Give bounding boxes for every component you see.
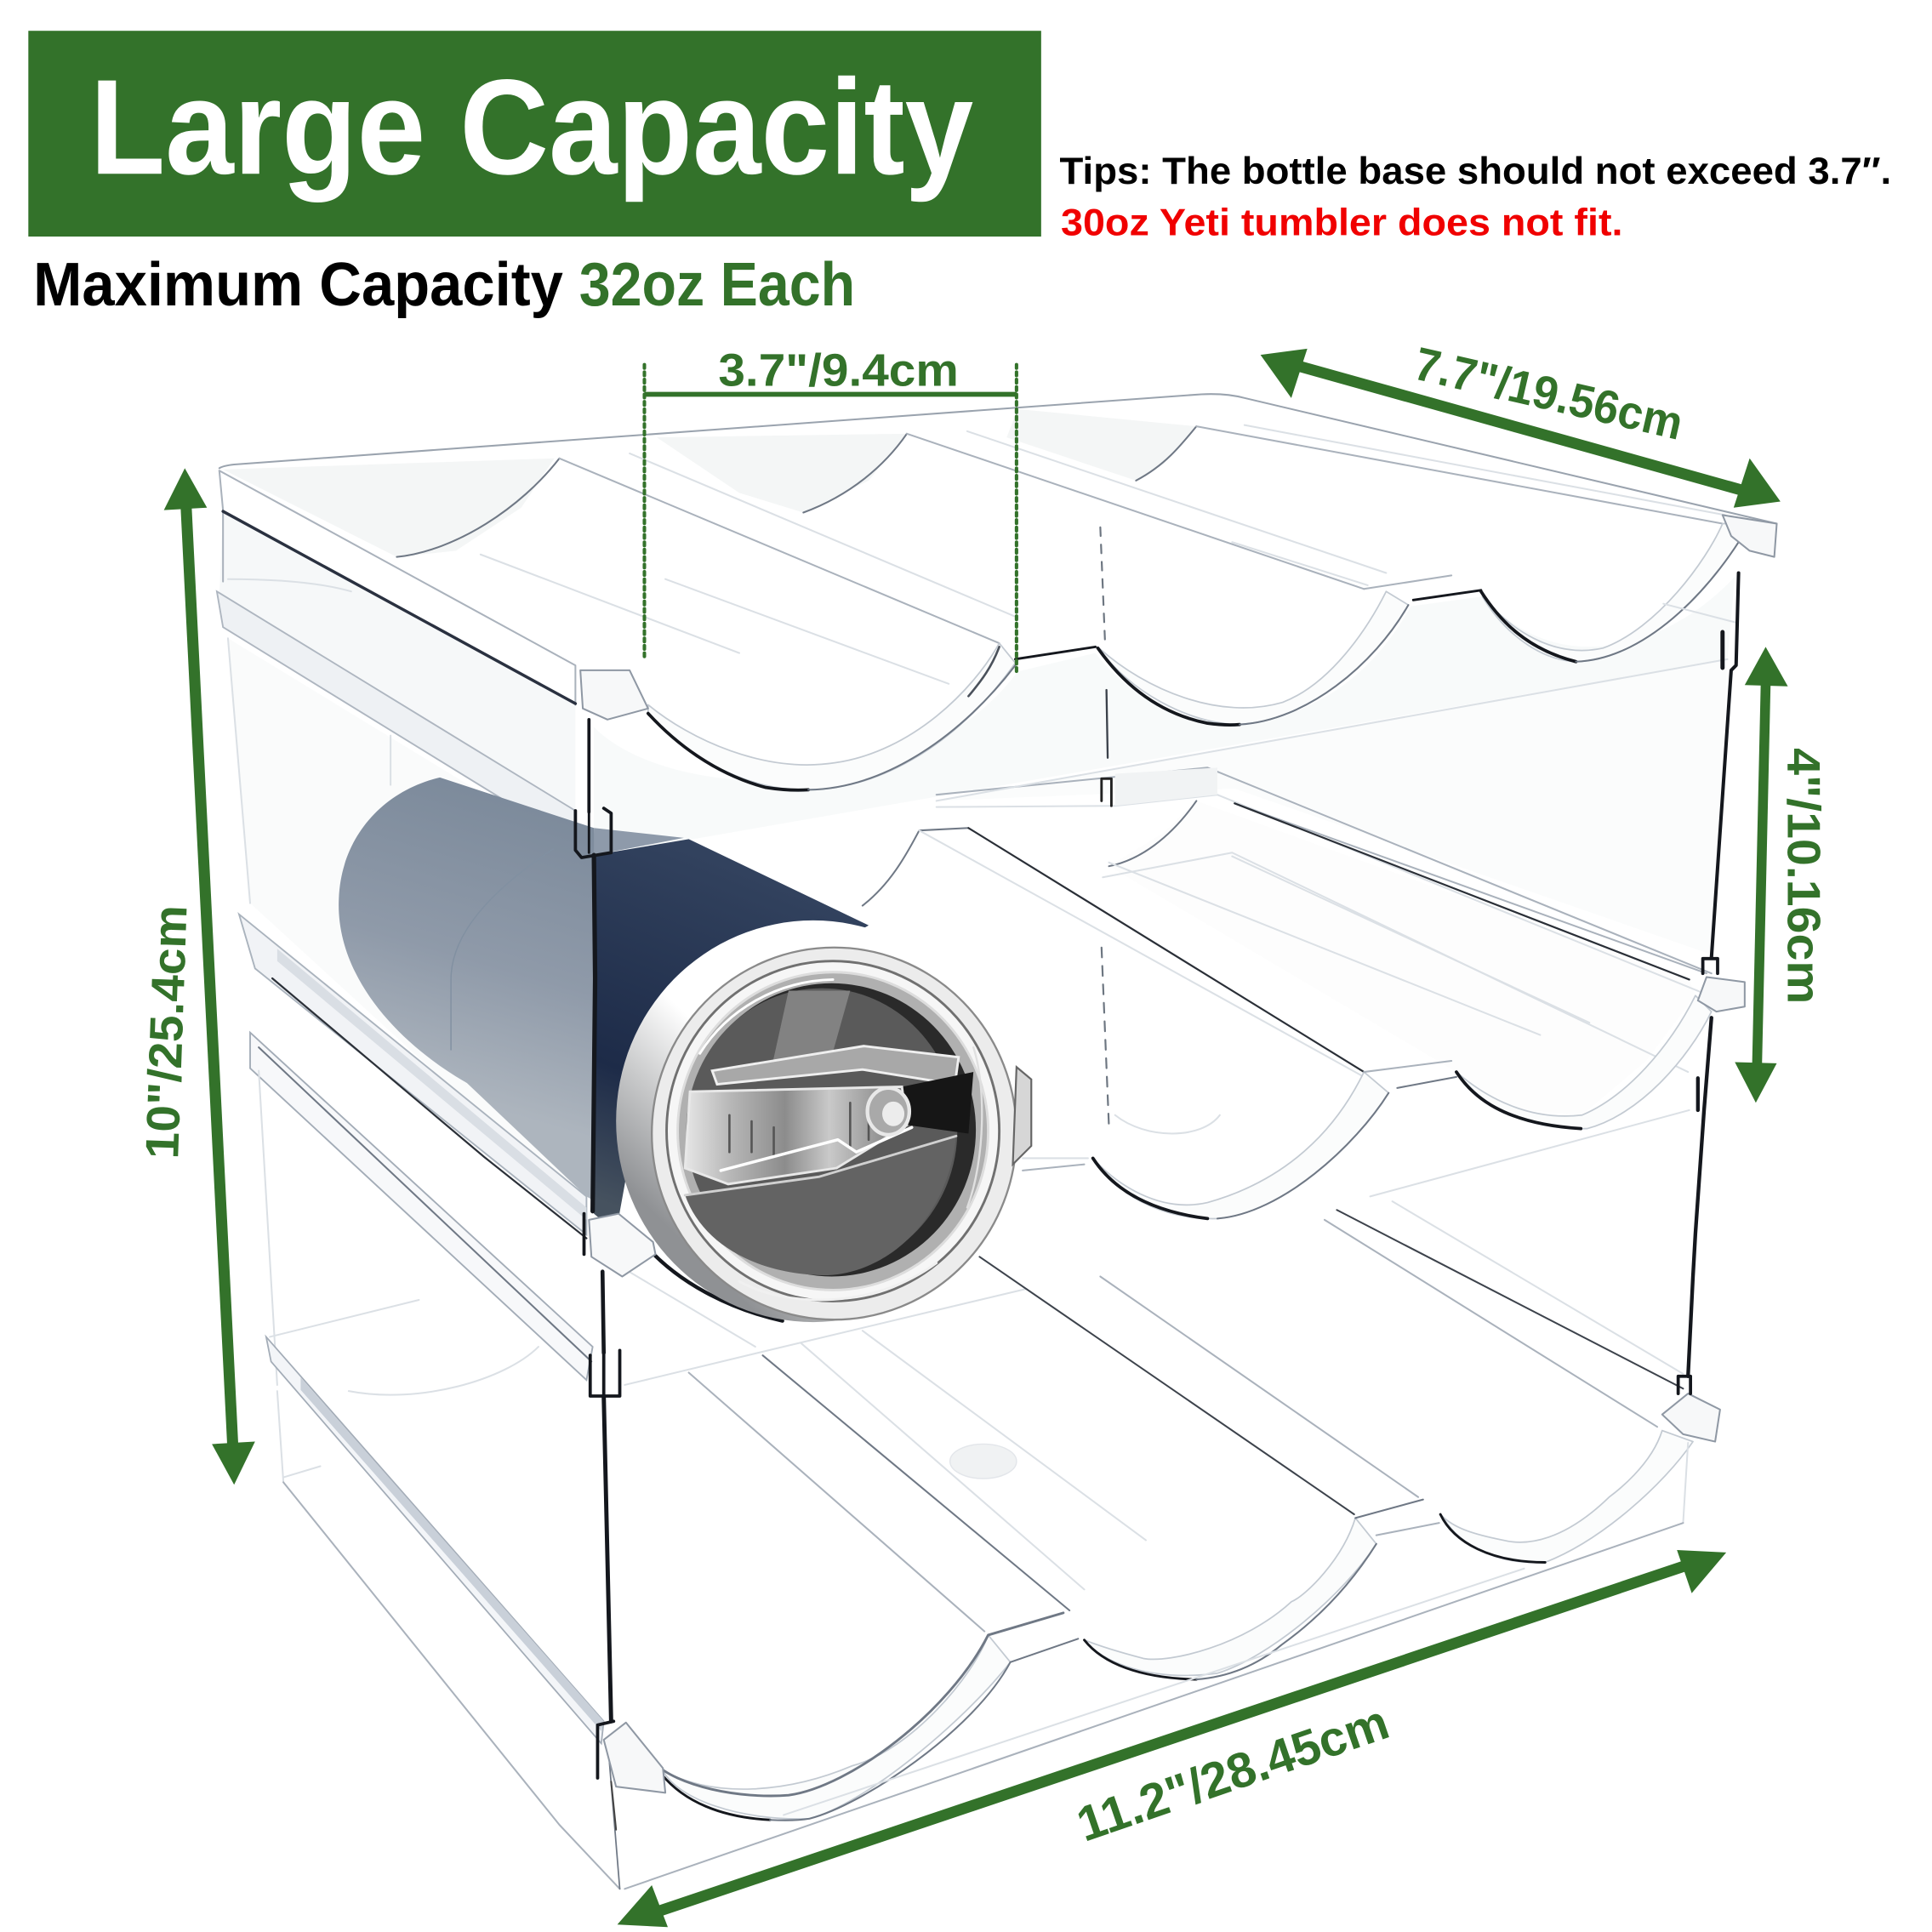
tumbler body seen through side panel bbox=[339, 778, 616, 1214]
back arcs bbox=[396, 459, 560, 557]
dimension: depth 7.7 inch arrow: 7.7"/19.56cm bbox=[1410, 337, 1688, 450]
top tier brackets bbox=[580, 670, 648, 720]
clear lid bbox=[652, 948, 1031, 1319]
fourth rail band bbox=[250, 1033, 593, 1380]
third rail band bbox=[239, 915, 586, 1234]
dimension: tier height 4 inch arrow bbox=[1735, 647, 1831, 1103]
dimension: bottle width 3.7 inch bbox=[644, 345, 1017, 675]
top plate outline bbox=[219, 394, 1777, 524]
tips text: Tips: The bottle base should not exceed 3.7′′. bbox=[1060, 149, 1891, 192]
top tier bbox=[219, 394, 1777, 790]
dimension: bottle width 3.7 inch: 3.7"/9.4cm bbox=[718, 345, 959, 396]
scallop one bbox=[648, 643, 1015, 789]
dimension: tier height 4 inch arrow: 4"/10.16cm bbox=[1778, 748, 1831, 1004]
small grey strip above dark body bbox=[594, 828, 684, 855]
tips text bbox=[1060, 149, 1891, 244]
dimension: depth 7.7 inch arrow bbox=[1261, 337, 1781, 508]
maximum capacity subtitle bbox=[33, 250, 855, 319]
lid slider bbox=[712, 1046, 959, 1085]
center seam marks bbox=[1100, 527, 1111, 1126]
middle tier bbox=[863, 659, 1745, 1218]
middle left bracket bbox=[589, 1214, 656, 1276]
dimension: height 10 inch arrow: 10"/25.4cm bbox=[135, 904, 197, 1160]
post clips bbox=[575, 808, 611, 858]
lid highlights bbox=[770, 990, 850, 1074]
silver band bbox=[616, 920, 1011, 1322]
second rail band bbox=[217, 591, 575, 844]
scallop three bbox=[1482, 524, 1750, 662]
maximum capacity subtitle: Maximum Capacity bbox=[33, 250, 563, 319]
tumbler bbox=[339, 778, 1031, 1322]
left rear rails bbox=[217, 579, 620, 1889]
faint rack panels bbox=[219, 409, 1735, 1201]
side posts and clips bbox=[575, 573, 1739, 1830]
scallop two bbox=[1099, 591, 1408, 725]
maximum capacity subtitle: 32oz Each bbox=[579, 250, 855, 319]
dark top tier rail bbox=[223, 511, 575, 704]
fifth rail band bbox=[266, 1336, 604, 1743]
center button bbox=[950, 1444, 1017, 1479]
wine rack bbox=[217, 394, 1777, 1889]
title banner: Large Capacity bbox=[90, 51, 973, 202]
tips text: 30oz Yeti tumbler does not fit. bbox=[1061, 201, 1622, 244]
bottom left bracket bbox=[604, 1723, 665, 1792]
dimension: width 11.2 inch arrow bbox=[618, 1550, 1726, 1927]
dark arc under lid bbox=[647, 1247, 783, 1321]
bottom tier bbox=[608, 1201, 1720, 1889]
tumbler dark body bbox=[594, 839, 869, 1232]
dimension: width 11.2 inch arrow: 11.2"/28.45cm bbox=[1070, 1695, 1396, 1853]
title banner bbox=[28, 31, 1041, 237]
dimension: height 10 inch arrow bbox=[135, 468, 255, 1485]
ridges bbox=[560, 459, 1000, 643]
tumbler body seam bbox=[451, 849, 553, 1050]
